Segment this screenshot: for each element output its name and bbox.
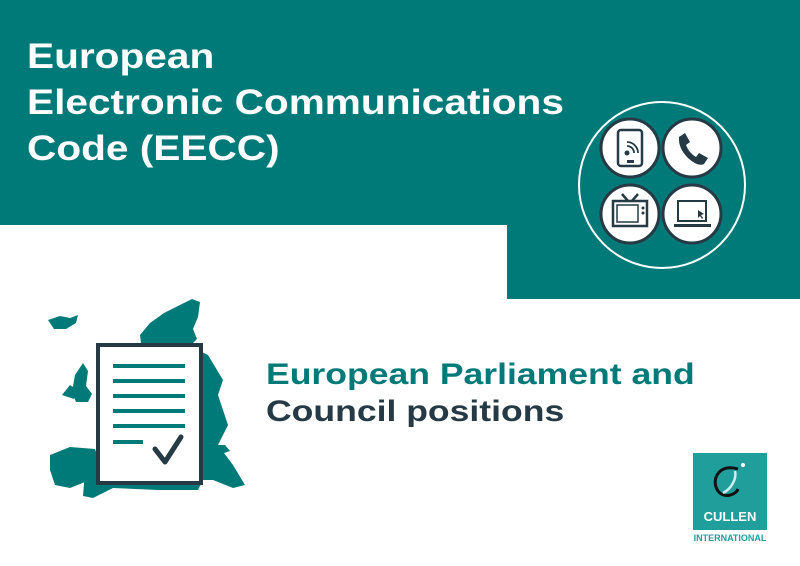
title <box>27 37 564 168</box>
header band <box>0 0 800 225</box>
subtitle: European Parliament and <box>266 358 695 391</box>
title: Electronic Communications <box>27 83 564 122</box>
logo: Cullen International: CULLEN <box>704 509 756 524</box>
map of Europe <box>48 299 245 498</box>
subtitle <box>266 358 695 428</box>
icon group: devices <box>578 101 746 269</box>
subtitle: Council positions <box>266 395 564 428</box>
icon: laptop <box>663 185 721 243</box>
icon: europe map with document <box>48 299 245 498</box>
logo: Cullen International: INTERNATIONAL <box>694 533 766 543</box>
title: European <box>27 37 214 76</box>
document <box>98 345 201 483</box>
header band extension <box>507 224 800 299</box>
icon: smartphone <box>601 119 659 177</box>
title: Code (EECC) <box>27 129 280 168</box>
icon: phone handset <box>663 119 721 177</box>
logo: Cullen International <box>693 453 767 543</box>
icon: television <box>601 185 659 243</box>
